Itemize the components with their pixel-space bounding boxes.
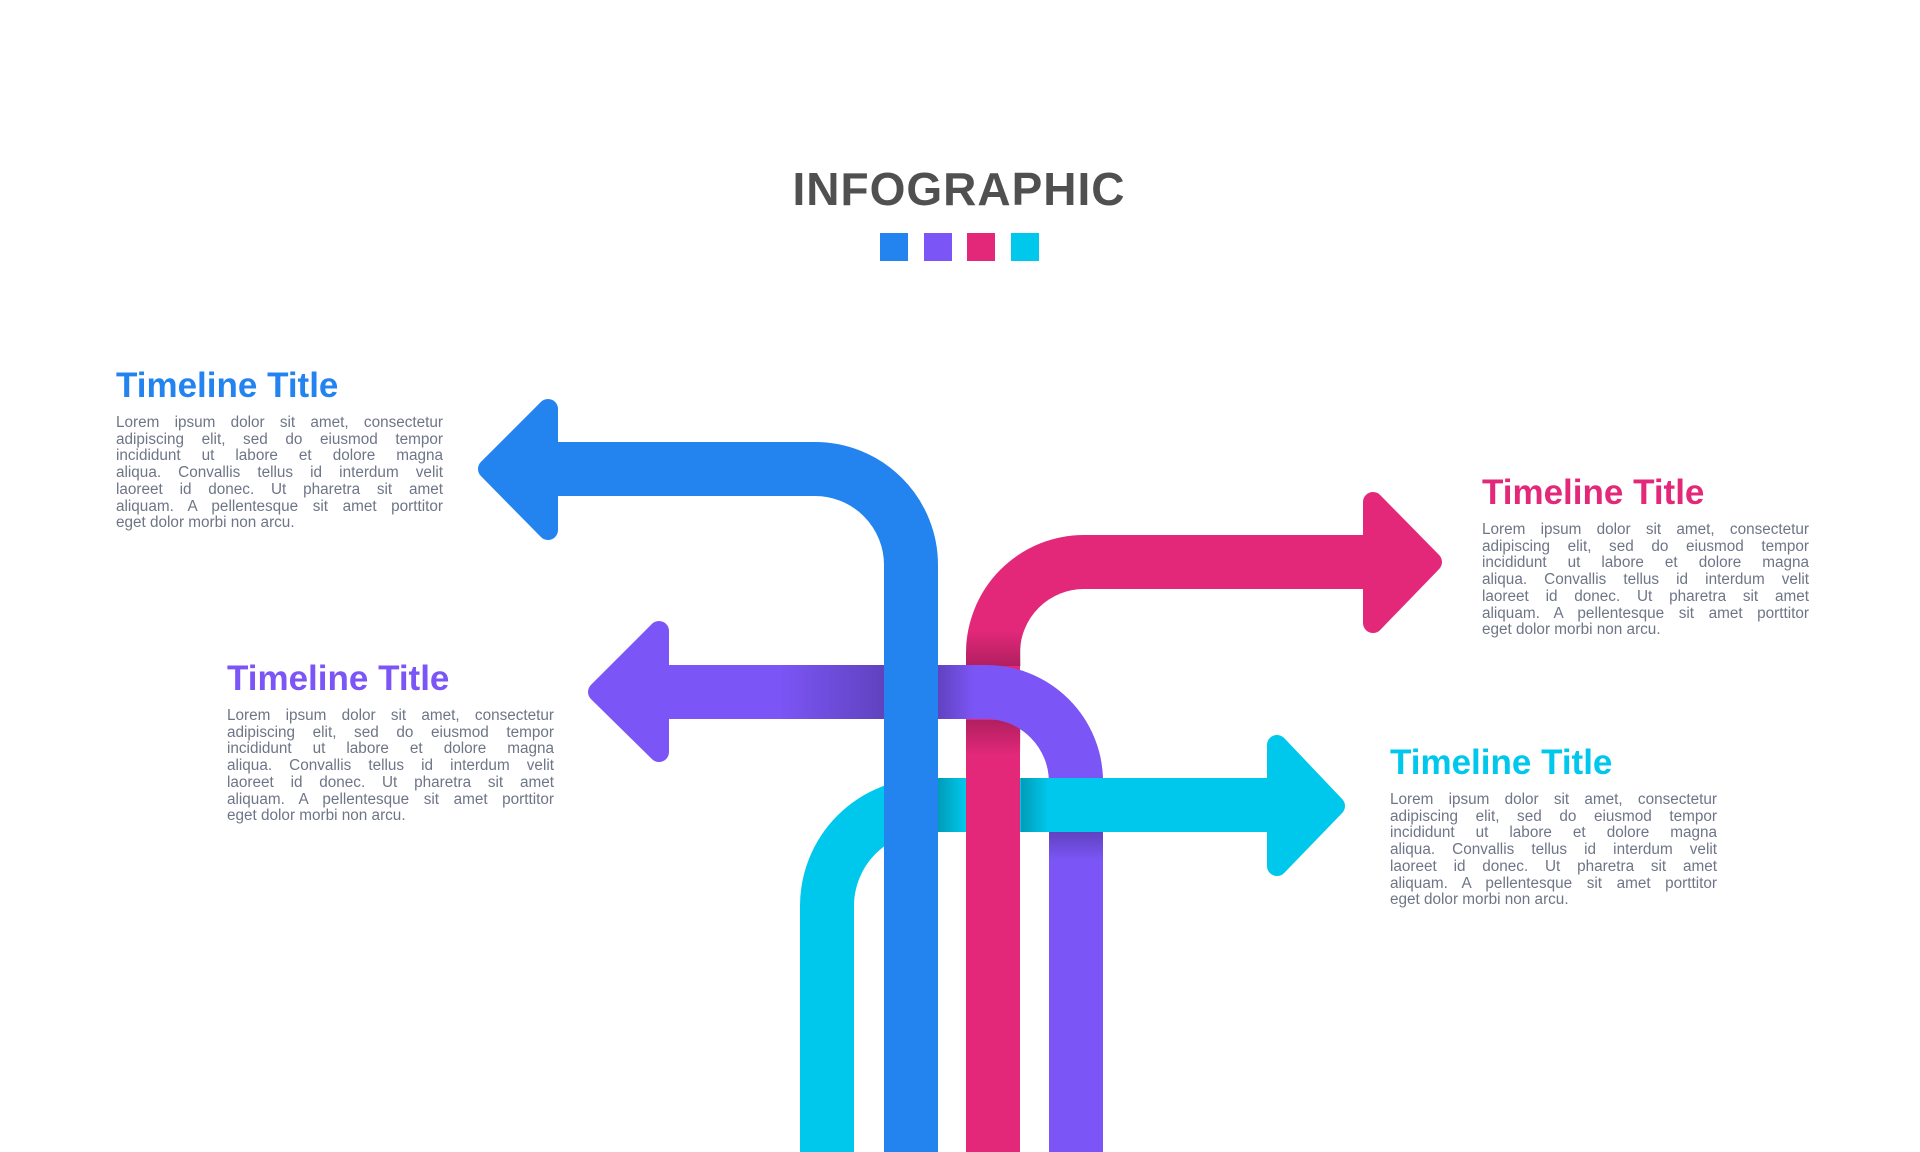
- body: purple: aliquam. A pellentesque sit amet porttitor: [227, 791, 554, 808]
- body: pink: aliqua. Convallis tellus id interdum velit: [1482, 571, 1809, 588]
- body: pink: laoreet id donec. Ut pharetra sit amet: [1482, 588, 1809, 605]
- body: purple: eget dolor morbi non arcu.: [227, 807, 406, 824]
- text block: purple: [227, 659, 554, 824]
- blue arrow: [488, 409, 911, 1152]
- body: blue: [116, 414, 443, 531]
- body: pink: Lorem ipsum dolor sit amet, consectetur: [1482, 521, 1809, 538]
- body: blue: adipiscing elit, sed do eiusmod tempor: [116, 431, 443, 448]
- body: purple: aliqua. Convallis tellus id interdum velit: [227, 757, 554, 774]
- text block: blue: [116, 366, 443, 531]
- cyan arrow: [827, 745, 1335, 1152]
- body: cyan: eget dolor morbi non arcu.: [1390, 891, 1569, 908]
- body: cyan: incididunt ut labore et dolore magna: [1390, 824, 1717, 841]
- body: pink: aliquam. A pellentesque sit amet porttitor: [1482, 605, 1809, 622]
- body: pink: eget dolor morbi non arcu.: [1482, 621, 1661, 638]
- heading: purple: Timeline Title: [227, 659, 449, 698]
- purple arrow upper: [598, 631, 1076, 800]
- text block: pink: [1482, 473, 1809, 638]
- body: purple: incididunt ut labore et dolore magna: [227, 740, 554, 757]
- purple arrow lower vertical: [986, 692, 1103, 1152]
- body: pink: [1482, 521, 1809, 638]
- body: cyan: adipiscing elit, sed do eiusmod tempor: [1390, 808, 1717, 825]
- body: blue: aliqua. Convallis tellus id interdum velit: [116, 464, 443, 481]
- heading: pink: Timeline Title: [1482, 473, 1704, 512]
- body: blue: eget dolor morbi non arcu.: [116, 514, 295, 531]
- color squares: [880, 233, 1039, 261]
- text block: cyan: [1390, 743, 1717, 908]
- body: cyan: aliquam. A pellentesque sit amet porttitor: [1390, 875, 1717, 892]
- body: cyan: aliqua. Convallis tellus id interdum velit: [1390, 841, 1717, 858]
- body: blue: Lorem ipsum dolor sit amet, consectetur: [116, 414, 443, 431]
- body: blue: laoreet id donec. Ut pharetra sit amet: [116, 481, 443, 498]
- body: cyan: [1390, 791, 1717, 908]
- body: pink: adipiscing elit, sed do eiusmod tempor: [1482, 538, 1809, 555]
- arrows diagram: [478, 399, 1442, 1152]
- body: purple: Lorem ipsum dolor sit amet, consectetur: [227, 707, 554, 724]
- body: blue: incididunt ut labore et dolore magna: [116, 447, 443, 464]
- pink arrow: [966, 502, 1432, 1152]
- body: purple: [227, 707, 554, 824]
- heading: cyan: Timeline Title: [1390, 743, 1612, 782]
- body: cyan: laoreet id donec. Ut pharetra sit amet: [1390, 858, 1717, 875]
- heading: blue: Timeline Title: [116, 366, 338, 405]
- title: INFOGRAPHIC: [792, 163, 1126, 215]
- body: purple: laoreet id donec. Ut pharetra sit amet: [227, 774, 554, 791]
- body: cyan: Lorem ipsum dolor sit amet, consectetur: [1390, 791, 1717, 808]
- body: blue: aliquam. A pellentesque sit amet porttitor: [116, 498, 443, 515]
- body: purple: adipiscing elit, sed do eiusmod tempor: [227, 724, 554, 741]
- body: pink: incididunt ut labore et dolore magna: [1482, 554, 1809, 571]
